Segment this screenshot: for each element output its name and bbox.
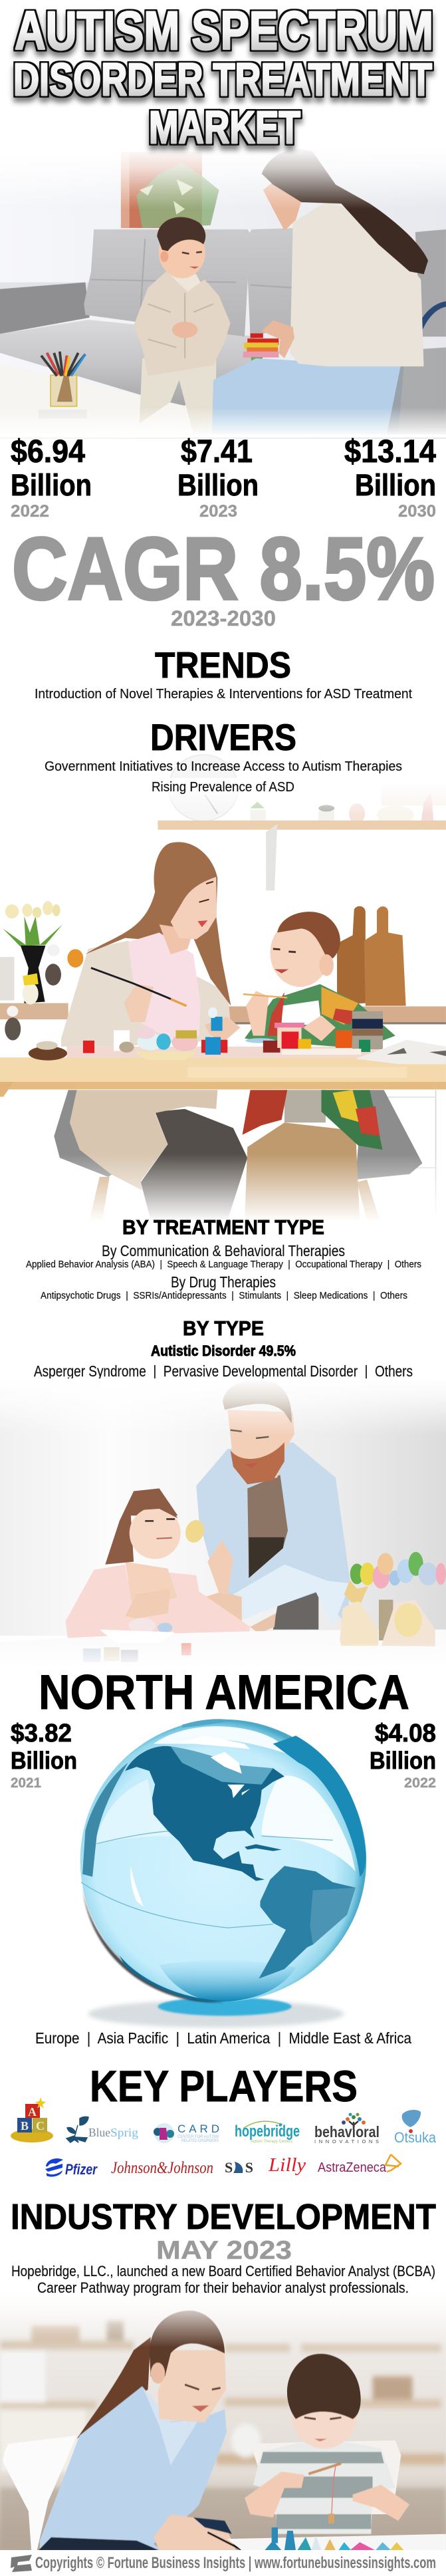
logo: CARD: CARD [177,2123,219,2135]
logo: Otsuka: Otsuka [394,2129,437,2146]
title [13,1,433,153]
stat: north america 2021 [11,1720,77,1791]
by treatment type: BY TREATMENT TYPE [122,1216,324,1239]
table with jars [0,1618,446,1668]
therapist [39,2311,242,2550]
logo: CARD: CENTER FOR AUTISM [177,2135,219,2139]
by treatment type: By Communication & Behavioral Therapies [102,1242,345,1259]
table and toys [227,2527,446,2550]
girl [65,1488,251,1642]
logo: Otsuka [394,2110,437,2146]
logo: BlueSprig: Sprig [110,2126,138,2139]
stat: 2023: $7.41 [181,434,253,469]
logo: behavioral innovations: behavioral [314,2123,380,2140]
tulips and vase [0,901,83,1041]
logo: AstraZeneca [318,2154,401,2175]
stat: 2030: 2030 [398,502,436,521]
stat: north america 2022: 2022 [404,1775,436,1791]
market size stats [11,434,436,521]
logo: ABC: C [36,2119,45,2132]
industry development [11,2197,436,2296]
cutting boards [337,906,406,1006]
stat: north america 2022 [370,1720,436,1791]
logo: SOS: S S [225,2159,253,2176]
boy [134,217,231,434]
craft items on the table [29,1007,446,1064]
stat: 2022: $6.94 [11,434,85,469]
company logos [11,2097,437,2178]
logo: hopebridge [235,2121,300,2144]
by type: BY TYPE [183,1317,264,1340]
stat: north america 2021: Billion [11,1747,77,1774]
globe [80,1719,366,2027]
stat: north america 2022: Billion [370,1747,436,1774]
north america [125,1746,284,1881]
boy [243,912,395,1220]
logo: behavioral innovations [314,2113,380,2144]
wooden blocks [243,333,279,361]
by treatment type [26,1216,421,1301]
photo: mother and son painting eggs [0,755,446,1225]
chairs [54,1090,422,1220]
stat: 2022: Billion [11,468,92,502]
stat: 2023 [177,434,259,521]
globe shadow [88,2000,344,2027]
mother [61,842,247,1220]
stat: 2022: 2022 [11,502,49,521]
other regions: Europe | Asia Pacific | Latin America | Middle East & Africa [35,2029,411,2047]
south america [259,1866,356,1979]
stat: north america 2022: $4.08 [375,1720,436,1747]
CAGR: 2023-2030 [171,606,276,630]
logo: ABC [11,2097,53,2142]
logo: Lilly: Lilly [268,2155,306,2176]
trends [35,644,412,702]
stat: 2030: Billion [355,468,436,502]
drivers: Rising Prevalence of ASD [152,780,294,795]
logo: Pfizer: Pfizer [65,2161,98,2178]
bunny and easter eggs [340,1552,446,1646]
chair [3,2436,77,2550]
by treatment type: Antipsychotic Drugs | SSRIs/Antidepressants | Stimulants | Sleep Medications | Others [41,1290,407,1301]
logo: hopebridge: hopebridge [235,2123,300,2140]
stat: 2030 [344,434,436,521]
logo: Johnson and Johnson: Johnson&Johnson [111,2159,213,2177]
trends: TRENDS [155,644,291,686]
father [171,1380,350,1635]
title: MARKET [149,102,300,153]
child [245,2354,409,2534]
counter shelf [0,1003,446,1220]
logo: ABC: B [21,2119,29,2132]
industry development: MAY 2023 [156,2236,292,2265]
logo: Pfizer [45,2158,98,2178]
icon: fortune business insights logo [11,2555,32,2572]
logo: AstraZeneca: AstraZeneca [318,2160,387,2175]
by type [34,1317,413,1380]
by type: Autistic Disorder 49.5% [151,1343,296,1359]
photo: father and daughter with eggs [0,1378,446,1669]
window with plant [121,152,219,228]
blurred shelves [0,2321,446,2550]
logo: hopebridge: Autism Therapy Centers [251,2139,293,2144]
heading: key players: KEY PLAYERS [90,2061,358,2111]
stat: 2023: 2023 [199,502,237,521]
drivers: Government Initiatives to Increase Access to Autism Therapies [45,759,402,774]
stat: 2022 [11,434,92,521]
stat: 2030: $13.14 [344,434,436,469]
drivers: DRIVERS [150,716,296,758]
drivers [45,716,402,795]
therapist [212,149,446,434]
photo: therapist and child at table [0,2287,446,2576]
table top [0,1047,446,1096]
logo: BlueSprig [66,2117,138,2142]
logo: BlueSprig: Blue [88,2126,110,2139]
logo: CARD [154,2123,219,2143]
stat: 2023: Billion [177,468,259,502]
logo: ABC: A [28,2105,37,2119]
stat: north america 2021: 2021 [11,1775,41,1791]
logo: CARD: RELATED DISORDERS [181,2139,219,2143]
logo: behavioral innovations: INNOVATIONS [314,2138,379,2144]
stat: north america 2021: $3.82 [11,1720,72,1747]
wall bracket [266,824,277,890]
heading: north america: NORTH AMERICA [39,1666,409,1720]
trends: Introduction of Novel Therapies & Interventions for ASD Treatment [35,687,412,702]
photo: boy and therapist on a sofa [0,146,446,439]
sofa [0,228,446,407]
table with pencil cup [0,352,193,434]
globe highlights [81,1719,366,1928]
by treatment type: By Drug Therapies [171,1273,276,1291]
